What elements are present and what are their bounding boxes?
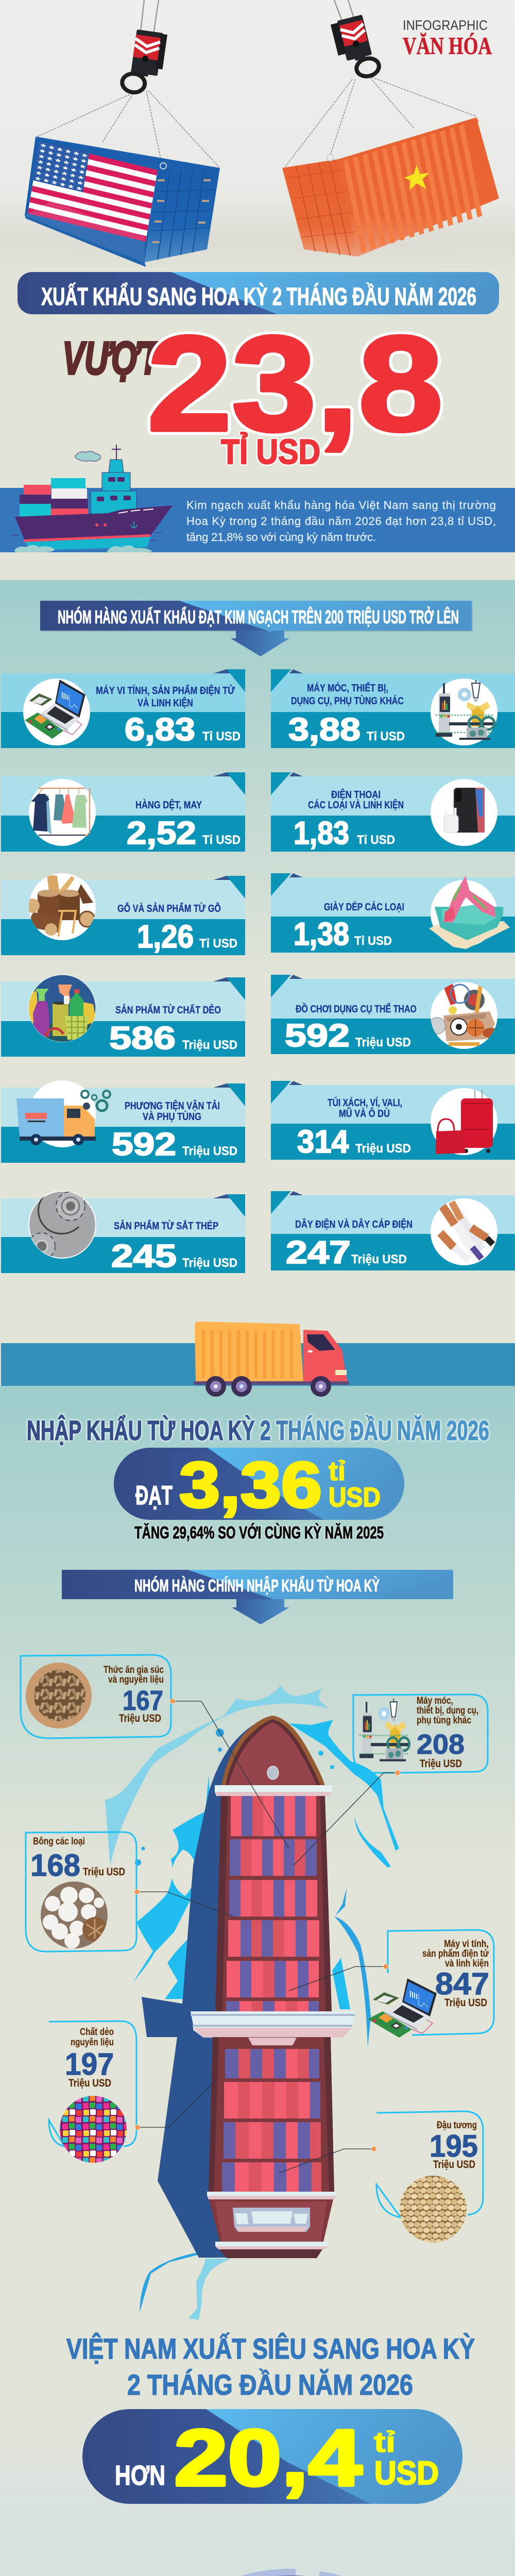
callout: computers [368, 1930, 494, 2038]
card: steel: Triệu USD [182, 1256, 237, 1270]
card: machinery [271, 669, 515, 748]
callout: computers: Triệu USD [444, 1997, 487, 2009]
callout: machinery [353, 1694, 488, 1773]
card: plastic products [1, 975, 245, 1057]
image: feed pellets [26, 1663, 92, 1728]
image: cotton bolls [41, 1882, 108, 1948]
card: wood: 1,26 [137, 919, 194, 955]
section header: export groups [40, 601, 473, 656]
summary paragraph: Kim ngạch xuất khẩu hàng hóa Việt Nam sang thị trường [186, 499, 496, 512]
background: beige lower exports [0, 992, 515, 1344]
background: hero [0, 0, 515, 272]
icon: red suitcase and bag [431, 1088, 497, 1155]
card: machinery: 3,88 [288, 712, 360, 748]
pill: reached 3,36 billion USD [114, 1448, 404, 1521]
aft deck [207, 2192, 336, 2199]
pill: more than 20,4 billion USD: HƠN [115, 2460, 165, 2491]
background: exports section [0, 580, 515, 992]
card: wood: Tỉ USD [199, 937, 237, 951]
heading: trade surplus [66, 2332, 475, 2401]
arrow down [232, 1599, 289, 1624]
callout: machinery: Triệu USD [420, 1758, 462, 1770]
callout: soybeans [376, 2111, 483, 2243]
icon: copper cables [431, 1198, 497, 1265]
leader line: soybeans [279, 2146, 376, 2173]
card: phones: CÁC LOẠI VÀ LINH KIỆN [308, 799, 404, 811]
callout: computers: 847 [435, 1967, 489, 2001]
fore deck [215, 1785, 332, 1796]
headline number: vượt 23,8 tỉ USD: TỈ USD [221, 432, 320, 471]
callout: cotton [26, 1832, 136, 1952]
heading: trade surplus: 2 THÁNG ĐẦU NĂM 2026 [127, 2368, 413, 2401]
card: cables: Triệu USD [351, 1252, 407, 1266]
mid deck [191, 2011, 355, 2038]
card: cables: 247 [286, 1235, 351, 1270]
card: steel [1, 1191, 245, 1274]
leader line: machinery [294, 1770, 400, 1866]
callout: animal feed: Thức ăn gia súc [104, 1665, 164, 1675]
card: phones: ĐIỆN THOẠI [331, 788, 381, 801]
illustration: Vietnam flag container on crane [282, 0, 499, 257]
card: bags: Triệu USD [355, 1142, 411, 1156]
summary paragraph: tăng 21,8% so với cùng kỳ năm trước. [186, 531, 376, 544]
callout: plastics: Triệu USD [68, 2077, 111, 2089]
background: beige top section [0, 272, 515, 581]
hull [215, 1796, 332, 2011]
pill: more than 20,4 billion USD: tỉ [374, 2426, 396, 2458]
card: wood [1, 873, 245, 955]
card: steel: SẢN PHẨM TỪ SẮT THÉP [114, 1219, 218, 1232]
callout: plastics [49, 2021, 136, 2163]
summary paragraph [186, 499, 496, 544]
logo: Infographic Văn Hóa: INFOGRAPHIC [403, 18, 488, 33]
logo: Infographic Văn Hóa [403, 18, 492, 60]
stern [209, 2199, 333, 2242]
leader line: cotton [134, 1889, 233, 1917]
growth note: TĂNG 29,64% SO VỚI CÙNG KỲ NĂM 2025 [134, 1523, 384, 1542]
icon: steel gears [28, 1191, 96, 1260]
callout: computers: Máy vi tính, [444, 1939, 489, 1950]
blue band with summary [0, 488, 515, 552]
callout: plastics: nguyên liệu [71, 2037, 114, 2048]
section header: main imports [62, 1570, 453, 1624]
callout: animal feed [21, 1655, 171, 1738]
card: footwear [271, 873, 515, 953]
card: textiles: 2,52 [127, 816, 196, 851]
ship shadow [142, 1716, 272, 2258]
pill: reached 3,36 billion USD: tỉ [329, 1456, 346, 1486]
pill: more than 20,4 billion USD: 20,4 [174, 2413, 362, 2502]
card: computers and electronics: Tỉ USD [202, 730, 241, 743]
card: wood: GỖ VÀ SẢN PHẨM TỪ GỖ [117, 902, 221, 914]
card: footwear: 1,38 [294, 917, 349, 952]
bridge [233, 2208, 310, 2232]
card: phones: Tỉ USD [357, 833, 395, 847]
arrow down [231, 631, 289, 656]
illustration: US flag container on crane [25, 0, 220, 267]
pill: reached 3,36 billion USD: ĐẠT [135, 1481, 173, 1511]
callout: soybeans: 195 [430, 2129, 478, 2163]
water splashes [105, 1685, 399, 2320]
card: toys and sports [271, 975, 515, 1054]
card: cables: DÂY ĐIỆN VÀ DÂY CÁP ĐIỆN [295, 1218, 413, 1230]
aft hull [209, 2037, 334, 2192]
card: toys and sports: 592 [285, 1018, 350, 1054]
pill: reached 3,36 billion USD: USD [329, 1482, 381, 1513]
card: vehicles: 592 [112, 1127, 176, 1162]
card: plastic products: 586 [109, 1021, 176, 1056]
card: bags [271, 1081, 515, 1160]
card: steel: 245 [111, 1239, 177, 1274]
callout: animal feed: Triệu USD [119, 1713, 161, 1724]
callout: machinery: Máy móc, [417, 1696, 453, 1706]
card: machinery: MÁY MÓC, THIẾT BỊ, [307, 682, 388, 694]
callout: computers: và linh kiện [445, 1958, 489, 1969]
icon: machine [359, 1699, 409, 1761]
card: vehicles: Triệu USD [182, 1144, 237, 1158]
bow [221, 1716, 325, 1786]
background: closing section [0, 2380, 515, 2576]
icon: delivery truck with gears [16, 1080, 110, 1147]
card: toys and sports: ĐỒ CHƠI DỤNG CỤ THỂ THAO [296, 1003, 417, 1015]
summary paragraph: Hoa Kỳ trong 2 tháng đầu năm 2026 đạt hơn 23,8 tỉ USD, [186, 515, 496, 528]
card: cables [271, 1191, 515, 1270]
card: toys and sports: Triệu USD [355, 1036, 411, 1049]
card: bags: MŨ VÀ Ô DÙ [339, 1107, 390, 1120]
illustration: container ship seen from above [142, 1716, 355, 2258]
container rows forward [226, 1796, 319, 2011]
icon: clothes rack [29, 779, 96, 846]
headline number: vượt 23,8 tỉ USD: 23,8 [147, 308, 443, 459]
card: plastic products: Triệu USD [182, 1038, 237, 1052]
background: imports section [0, 1386, 515, 1880]
icon: laptop and circuit board [368, 1978, 437, 2038]
title bar: exports to US [18, 272, 499, 314]
callout: plastics: Chất dẻo [80, 2027, 114, 2038]
callout: plastics: 197 [65, 2047, 114, 2081]
leader line: computers [289, 1964, 388, 1991]
card: vehicles: VÀ PHỤ TÙNG [143, 1110, 201, 1123]
callout: computers: sản phẩm điện tử [422, 1948, 489, 1959]
icon: smartphone and earbuds [431, 779, 497, 846]
headline number: vượt 23,8 tỉ USD [62, 308, 443, 471]
card: textiles: HÀNG DỆT, MAY [135, 799, 202, 811]
container rows aft [222, 2049, 321, 2192]
card: machinery: Tỉ USD [367, 730, 405, 743]
card: bags: 314 [297, 1124, 349, 1160]
pill: reached 3,36 billion USD: 3,36 [179, 1449, 322, 1521]
icon: plastic bottles [26, 975, 98, 1044]
icon: sports equipment box [429, 982, 499, 1049]
blue band behind truck [1, 1343, 515, 1386]
card: vehicles [1, 1080, 245, 1163]
icon: machine [431, 679, 497, 745]
callout: soybeans: Đậu tương [437, 2120, 477, 2131]
card: footwear: GIÀY DÉP CÁC LOẠI [324, 901, 404, 913]
card: machinery: DỤNG CỤ, PHỤ TÙNG KHÁC [291, 694, 404, 707]
callout: cotton: Triệu USD [83, 1866, 125, 1878]
card: computers and electronics: VÀ LINH KIỆN [138, 697, 193, 709]
card: phones [271, 772, 515, 852]
section header: main imports: NHÓM HÀNG CHÍNH NHẬP KHẨU TỪ HOA KỲ [134, 1576, 380, 1595]
card: phones: 1,83 [294, 816, 349, 851]
callout: animal feed: 167 [123, 1685, 163, 1716]
card: textiles: Tỉ USD [202, 833, 241, 847]
icon: laptop and circuit board [23, 679, 90, 745]
stern deck [215, 2242, 328, 2249]
callout: machinery: phụ tùng khác [417, 1715, 471, 1726]
leader line: feed [170, 1699, 289, 1849]
headline number: vượt 23,8 tỉ USD: 23,8 [147, 308, 443, 459]
card: plastic products: SẢN PHẨM TỪ CHẤT DẺO [115, 1004, 221, 1016]
callout: machinery: thiết bị, dụng cụ, [417, 1705, 478, 1716]
illustration: globe [241, 2569, 342, 2576]
card: vehicles: PHƯƠNG TIỆN VẬN TẢI [125, 1099, 220, 1112]
pill: more than 20,4 billion USD [82, 2409, 462, 2504]
illustration: cargo ship [11, 445, 173, 553]
card: computers and electronics: MÁY VI TÍNH, SẢN PHẨM ĐIỆN TỬ [96, 684, 235, 697]
card: bags: TÚI XÁCH, VÍ, VALI, [328, 1096, 402, 1109]
callout: animal feed: và nguyên liệu [108, 1674, 164, 1685]
card: footwear: Tỉ USD [354, 934, 392, 948]
callout: cotton: Bông các loại [33, 1836, 85, 1847]
image: plastic beads [60, 2096, 127, 2163]
icon: timber logs [25, 873, 96, 940]
illustration: orange truck [194, 1321, 349, 1397]
card: computers and electronics: 6,83 [125, 712, 195, 748]
callout: machinery: 208 [417, 1729, 465, 1760]
leader line: plastics [135, 2079, 217, 2130]
background: ship section [0, 1880, 515, 2396]
pill: more than 20,4 billion USD: USD [374, 2454, 439, 2492]
card: computers and electronics [1, 669, 245, 748]
icon: shoes on a box [429, 876, 510, 949]
card: textiles [1, 772, 245, 852]
headline number: vượt 23,8 tỉ USD: VƯỢT [62, 333, 162, 384]
callout: soybeans: Triệu USD [433, 2159, 475, 2171]
callout: cotton: 168 [30, 1848, 80, 1883]
headline number: vượt 23,8 tỉ USD: TỈ USD [221, 432, 320, 471]
image: soybeans [400, 2176, 467, 2243]
